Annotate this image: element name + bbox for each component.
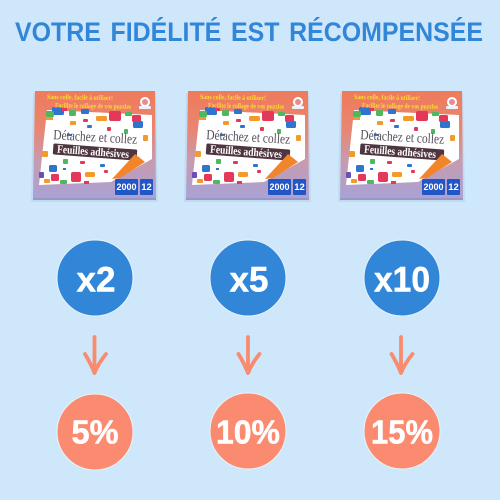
reward badge 10%	[210, 393, 286, 469]
box label: Feuilles adhésives	[364, 144, 437, 161]
box logo	[292, 97, 304, 109]
multiplier badge x2: x2	[77, 260, 115, 300]
reward badge 10%: 10%	[216, 414, 280, 450]
box footer numbers	[422, 179, 460, 195]
box logo	[446, 97, 458, 109]
box footer numbers: 12	[141, 182, 152, 193]
box headline: Détachez et collez	[360, 128, 445, 148]
multiplier badge x5	[210, 240, 286, 316]
box slogan: Sans colle, facile à utiliser!	[354, 93, 420, 102]
box headline: Détachez et collez	[53, 128, 138, 148]
puzzle pieces	[39, 107, 148, 184]
box slogan: Sans colle, facile à utiliser!	[200, 93, 266, 102]
box slogan	[200, 93, 284, 111]
box headline: Détachez et collez	[206, 128, 291, 148]
product box 2	[184, 91, 311, 202]
box slogan	[47, 93, 131, 111]
multiplier badge x10: x10	[374, 260, 430, 300]
arrow 1	[85, 337, 106, 373]
box orange badge	[419, 154, 452, 179]
box footer numbers: 12	[448, 182, 459, 193]
arrow 3	[392, 337, 412, 373]
multiplier badge x2	[57, 240, 133, 316]
multiplier badge x5: x5	[230, 260, 268, 300]
box logo	[139, 97, 151, 109]
box footer numbers: 12	[294, 182, 305, 193]
reward badge 5%: 5%	[72, 414, 118, 450]
box slogan: Facilite le collage de vos puzzles	[208, 102, 284, 111]
product box 1	[31, 91, 158, 202]
box label: Feuilles adhésives	[57, 144, 130, 161]
multiplier badge x10	[364, 240, 440, 316]
box footer numbers: 2000	[423, 182, 444, 192]
box footer numbers: 2000	[116, 182, 137, 192]
reward badge 15%	[364, 393, 440, 469]
puzzle pieces	[346, 107, 455, 184]
reward badge 5%	[57, 394, 133, 470]
box footer numbers	[268, 179, 306, 195]
box slogan: Facilite le collage de vos puzzles	[362, 102, 438, 111]
arrow 2	[238, 337, 260, 373]
box slogan: Sans colle, facile à utiliser!	[47, 93, 113, 102]
box label: Feuilles adhésives	[210, 144, 283, 161]
puzzle pieces	[192, 107, 301, 184]
box slogan: Facilite le collage de vos puzzles	[55, 102, 131, 111]
box orange badge	[112, 154, 145, 179]
reward badge 15%: 15%	[371, 414, 433, 450]
product box 3	[338, 91, 465, 202]
box slogan	[354, 93, 438, 111]
box orange badge	[265, 154, 298, 179]
box footer numbers	[115, 179, 153, 195]
box footer numbers: 2000	[269, 182, 290, 192]
